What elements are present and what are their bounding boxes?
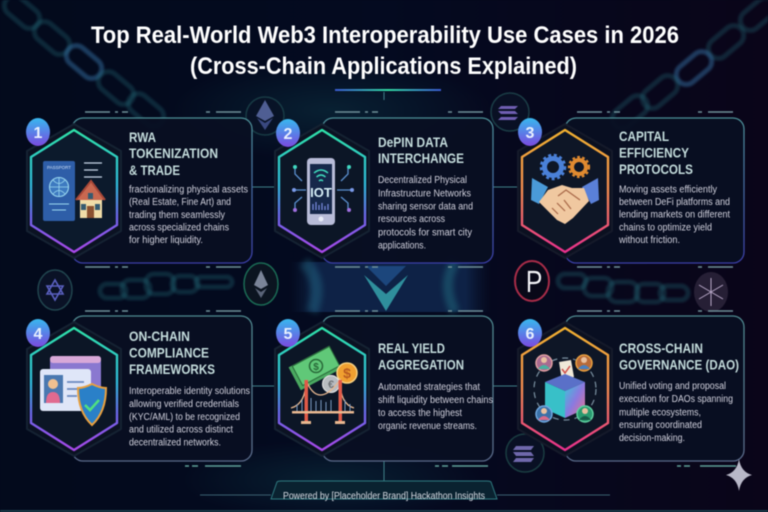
body 4: (KYC/AML) to be recognized [129,412,240,423]
coin: solana top [491,93,529,131]
body 1: fractionalizing physical assets [129,184,248,196]
icon: money and bridge [289,346,357,424]
body 2: applications. [378,240,426,252]
heading 3: EFFICIENCY [619,144,690,160]
icon: ballot box and voters [534,355,596,422]
number badge 2: 2 [284,126,293,143]
card 6: cross-chain governance [518,316,744,461]
card 3: capital efficiency protocols [518,118,744,263]
hexagon outline 4 [31,328,117,450]
title [91,22,679,80]
body 4: Interoperable identity solutions [129,386,250,397]
card 2: DePIN data interchange [275,118,493,263]
card 4: on-chain compliance frameworks [26,316,252,461]
body 2: resources across [378,214,445,225]
number badge 4 [26,319,50,347]
body 1: across specialized chains [129,222,229,234]
hexagon 2 [275,124,369,258]
body 3: Moving assets efficiently [619,184,717,196]
heading 5: AGGREGATION [378,356,464,372]
number badge 6: 6 [526,326,535,343]
body 3: chains to optimize yield [619,222,712,234]
chain: middle left [100,274,232,298]
heading 4 [129,328,215,377]
body 5: to access the highest [378,408,462,419]
hexagon outline 3 [522,130,608,252]
body 2 [378,175,473,252]
icon: money and bridge: € [328,379,334,391]
number badge 3 [518,118,542,146]
central backdrop with ethereum emblem [290,262,490,312]
panel 3 [565,118,744,263]
body 1 [129,184,248,246]
heading 3 [619,128,693,177]
heading 1 [129,129,218,178]
heading 5: REAL YIELD [378,340,445,356]
chain: top right [608,0,768,133]
chain: middle right [558,274,688,302]
icon: sparkle [726,459,752,491]
icon: IoT phone: IOT [310,185,332,200]
body 3: lending markets on different [619,210,730,220]
icon: money and bridge: $ [313,362,319,373]
body 1: trading them seamlessly [129,210,225,221]
heading 1: TOKENIZATION [129,145,218,161]
body 5: organic revenue streams. [378,421,477,432]
body 6: decision-making. [619,433,685,444]
body 6: multiple ecosystems, [619,408,701,418]
body 2: Decentralized Physical [378,175,467,186]
heading 6 [619,340,739,372]
footer tab: Powered by [Placeholder Brand] Hackathon Insights [283,491,485,502]
number badge 1 [26,118,50,146]
hexagon 6 [518,322,612,456]
chain: top left [0,0,168,131]
title: (Cross-Chain Applications Explained) [190,53,577,80]
coin: ethereum top [246,97,284,135]
card 5: real yield aggregation [275,316,493,461]
body 6: execution for DAOs spanning [619,394,733,405]
heading 3: PROTOCOLS [619,161,693,177]
hexagon 5 [275,322,369,456]
number badge 6 [518,319,542,347]
heading 2: DePIN DATA [378,134,448,150]
number badge 4: 4 [34,326,43,343]
heading 5 [378,340,464,372]
hexagon outline 5 [279,328,365,450]
number badge 5 [276,319,300,347]
number badge 1: 1 [34,125,43,142]
coin: solana bottom [506,434,544,472]
panel 4 [72,316,252,461]
icon: money and bridge: $ [343,365,351,381]
body 5: Automated strategies that [378,382,480,393]
panel 6 [565,316,744,461]
body 6: ensuring coordinated [619,420,702,431]
body 2: sharing sensor data and [378,202,473,212]
heading 4: ON-CHAIN [129,328,190,344]
hexagon outline 2 [279,130,365,252]
icon: gears and handshake [531,155,599,224]
panel 2 [322,118,493,263]
hexagon 1 [27,124,121,258]
number badge 3: 3 [526,125,535,142]
icon: passport and house: PASSPORT [47,165,71,170]
body 3: without friction. [618,235,680,246]
body 4: and utilized across distinct [129,424,233,436]
icon: passport and house [43,161,105,221]
panel dashes [85,112,736,466]
body 3 [618,184,730,246]
heading 2: INTERCHANGE [378,150,464,166]
number badge 5: 5 [284,326,293,343]
connectors between cards [200,92,610,495]
heading 4: FRAMEWORKS [129,361,215,377]
heading 6: GOVERNANCE (DAO) [619,356,739,372]
heading 1: RWA [129,129,156,145]
panel 1 [72,118,252,263]
heading 2 [378,134,464,166]
coin: cosmos [694,272,728,312]
coin: hexagram [38,270,72,310]
number badge 2 [276,119,300,147]
coin: ethereum middle [244,263,278,305]
title underline [335,89,441,91]
body 2: protocols for smart city [378,228,472,238]
hexagon outline 1 [31,130,117,252]
panel 5 [322,316,493,461]
hexagon 3 [518,124,612,258]
body 1: (Real Estate, Fine Art) and [129,197,231,208]
heading 3: CAPITAL [619,128,669,144]
heading 6: CROSS-CHAIN [619,340,703,356]
coin: polkadot [515,261,549,301]
body 6 [619,381,733,444]
card 1: RWA tokenization and trade [26,118,252,263]
body 6: Unified voting and proposal [619,381,726,392]
body 5: shift liquidity between chains [378,395,493,406]
body 3: between DeFi platforms and [619,197,730,208]
heading 4: COMPLIANCE [129,344,209,360]
title: Top Real-World Web3 Interoperability Use Cases in 2026 [91,22,679,49]
body 4 [129,386,250,448]
footer tab [271,481,497,502]
body 1: for higher liquidity. [129,235,203,246]
body 5 [378,382,493,432]
body 2: Infrastructure Networks [378,188,471,200]
icon: ID card and shield [40,356,106,425]
heading 1: & TRADE [129,162,180,178]
body 4: allowing verified credentials [129,399,239,410]
hexagon outline 6 [522,328,608,450]
body 4: decentralized networks. [129,438,221,448]
icon: IoT phone [292,158,354,225]
hexagon 4 [27,322,121,456]
